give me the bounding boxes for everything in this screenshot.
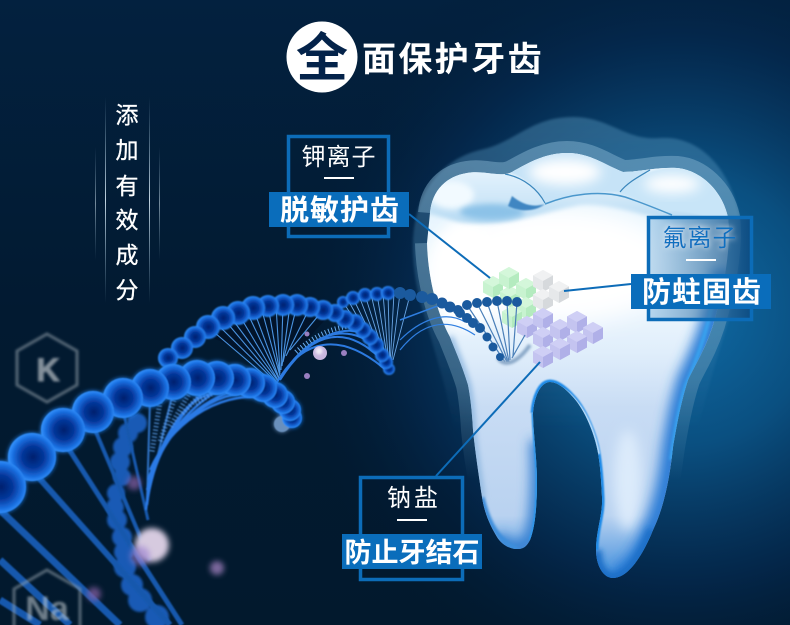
callout: fluoride ion: 防蛀固齿 <box>642 276 762 309</box>
tooth body <box>420 148 740 580</box>
middle cusp <box>510 153 649 199</box>
dna tip beads <box>394 287 522 361</box>
tooth arch edge <box>533 382 602 550</box>
hexagon molecules <box>483 267 603 368</box>
left edge shading <box>450 337 482 497</box>
title <box>286 22 544 92</box>
icon: title circle badge: 全 <box>296 30 348 88</box>
side heading: added active ingredients: 加 <box>116 137 138 163</box>
callout: sodium salt: 防止牙结石 <box>344 538 480 568</box>
dna helix lower front strand <box>0 360 302 625</box>
title text: 面保护牙齿 <box>362 41 544 79</box>
leader lines <box>409 214 631 476</box>
dna upper rungs <box>208 293 410 385</box>
right cusp <box>622 168 726 216</box>
crown ridge lines <box>505 170 650 203</box>
tooth root light core <box>614 430 642 530</box>
icon: Na element hexagon <box>14 570 80 625</box>
side heading: added active ingredients: 添 <box>116 102 138 128</box>
dna lower big beads <box>0 360 302 513</box>
crown valley <box>508 196 545 210</box>
callout: fluoride ion: 氟离子 <box>662 225 738 252</box>
callout: potassium ion: 脱敏护齿 <box>280 194 400 227</box>
icon: title circle badge <box>286 22 358 92</box>
side heading: added active ingredients <box>95 97 160 303</box>
white hexagons <box>533 270 569 311</box>
side heading: added active ingredients: 有 <box>116 173 138 199</box>
icon: K element hexagon <box>17 334 77 402</box>
tooth outer halo <box>413 117 741 440</box>
tooth edge shading <box>613 270 722 578</box>
green hexagons <box>483 267 536 328</box>
callout: sodium salt <box>342 478 482 580</box>
side heading: added active ingredients: 成 <box>116 242 138 268</box>
dna upper beads <box>158 286 395 375</box>
dna tip rungs <box>400 301 530 363</box>
icon: K element hexagon: K <box>36 352 60 388</box>
callout: potassium ion <box>269 136 409 236</box>
tooth white centre highlight <box>435 207 675 323</box>
dna helix upper back strand <box>158 286 410 385</box>
tooth <box>413 117 741 580</box>
dna tip inside tooth <box>394 287 530 363</box>
side heading: added active ingredients: 效 <box>116 207 138 233</box>
callout: potassium ion: 钾离子 <box>302 144 376 171</box>
dna lower rungs <box>0 387 288 625</box>
tooth inner halo <box>427 153 729 490</box>
callout: fluoride ion <box>631 218 771 320</box>
particles <box>87 332 347 601</box>
dna upper dark fan <box>205 316 325 382</box>
purple hexagons <box>517 308 603 368</box>
crown shading <box>430 153 728 226</box>
callout: sodium salt: 钠盐 <box>387 485 441 512</box>
dna lower back beads <box>106 413 169 625</box>
side heading: added active ingredients: 分 <box>116 277 138 303</box>
